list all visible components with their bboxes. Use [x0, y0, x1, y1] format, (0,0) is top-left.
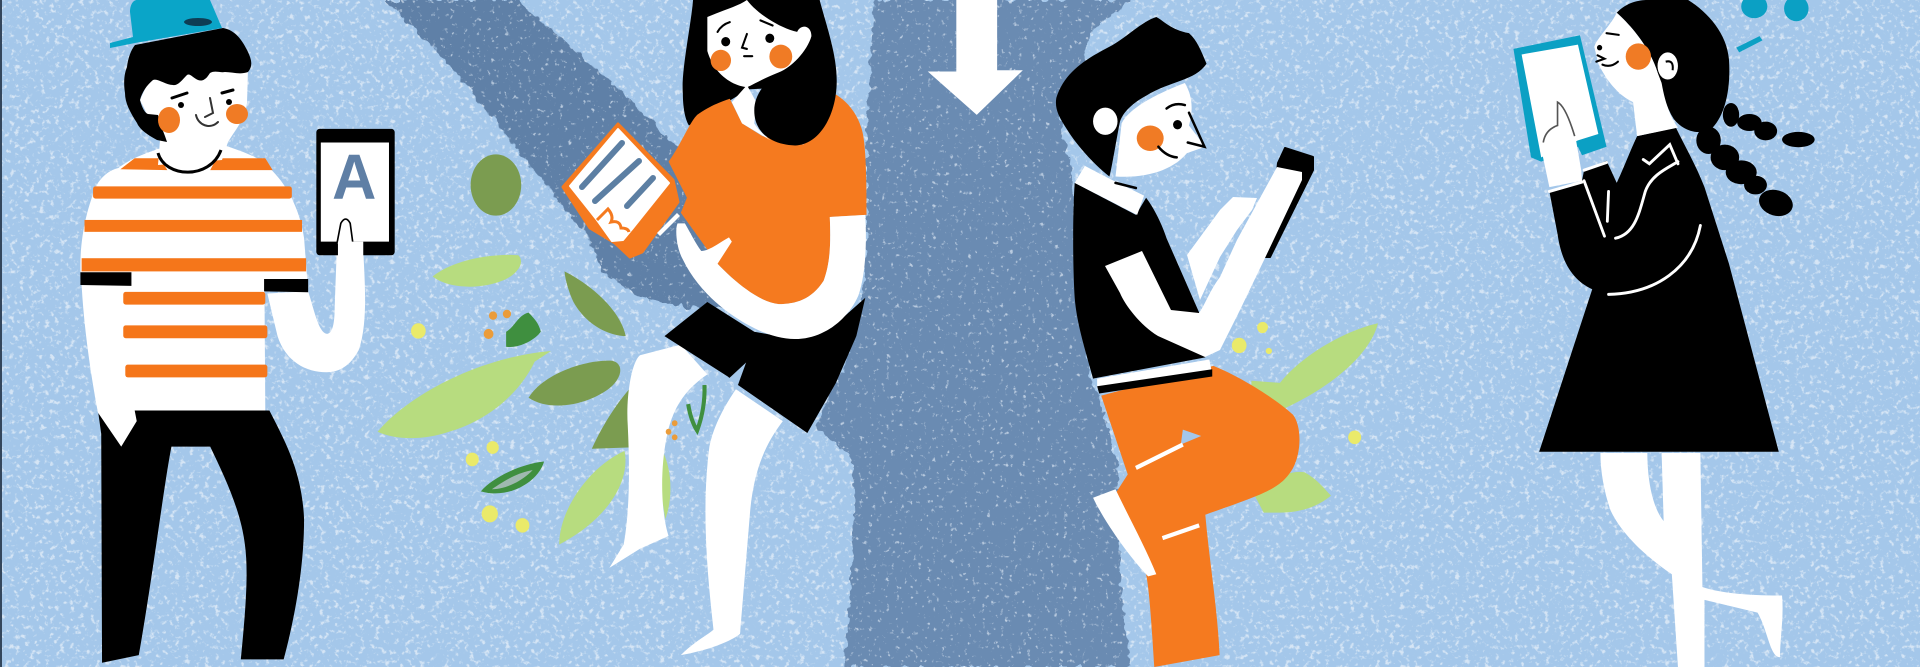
- braids: [1696, 103, 1815, 220]
- front leg: [681, 389, 783, 655]
- head: hair, face and hat: [110, 0, 251, 172]
- sleeve cuffs: [80, 272, 308, 292]
- tablet: [1513, 35, 1607, 187]
- person: boy with orange trousers and phone: [1056, 17, 1313, 667]
- road: tree-shaped blue path: [386, 0, 1130, 667]
- music notes: [1736, 0, 1809, 52]
- tablet with letter: [316, 129, 395, 259]
- face details: [721, 34, 774, 46]
- neck and collar: [1075, 166, 1144, 215]
- face details: [1173, 120, 1182, 129]
- green loop leaf: [688, 385, 705, 431]
- dress lines: [1549, 145, 1700, 294]
- person: boy with striped shirt and tablet: [80, 0, 395, 663]
- hair: [1617, 0, 1729, 132]
- legs: [1600, 453, 1783, 667]
- book: [563, 124, 680, 257]
- foot: [1093, 489, 1156, 576]
- belt: [1097, 359, 1211, 387]
- hair front lobe: [754, 0, 837, 145]
- face: [1116, 83, 1205, 177]
- neck: [732, 85, 771, 140]
- shirt stripes: [82, 158, 306, 377]
- phone: [1265, 148, 1313, 257]
- front arm: [1105, 167, 1302, 357]
- yellow dots: [1232, 322, 1272, 354]
- arm: [676, 215, 866, 339]
- cheek: [1626, 43, 1651, 70]
- person: girl with braids, black dress and teal tablet: [1513, 0, 1815, 667]
- hair: [1056, 17, 1207, 177]
- back leg: [609, 345, 707, 568]
- leaves: left cluster: [378, 154, 670, 545]
- right arm: [267, 251, 365, 372]
- shirt: [80, 145, 308, 447]
- cheek: [1137, 125, 1164, 151]
- shorts: [664, 298, 865, 433]
- shirt: [669, 94, 867, 304]
- person: girl with orange shirt and book: [563, 0, 867, 655]
- face: [1594, 13, 1662, 102]
- face details: [1596, 33, 1619, 66]
- arrow: white down arrow: [928, 0, 1023, 115]
- leaves: right cluster: [1232, 322, 1378, 513]
- trousers: [1101, 366, 1299, 667]
- shirt: [1073, 183, 1205, 379]
- back arm: [1187, 197, 1257, 300]
- hair back: [683, 0, 828, 125]
- dress: [1539, 128, 1779, 452]
- face: [707, 0, 811, 87]
- trousers: [98, 411, 304, 663]
- tablet with letter: A: [332, 142, 376, 213]
- ear: [1658, 52, 1678, 80]
- cheeks: [711, 50, 731, 71]
- road texture: pale speckles: [388, 0, 1126, 667]
